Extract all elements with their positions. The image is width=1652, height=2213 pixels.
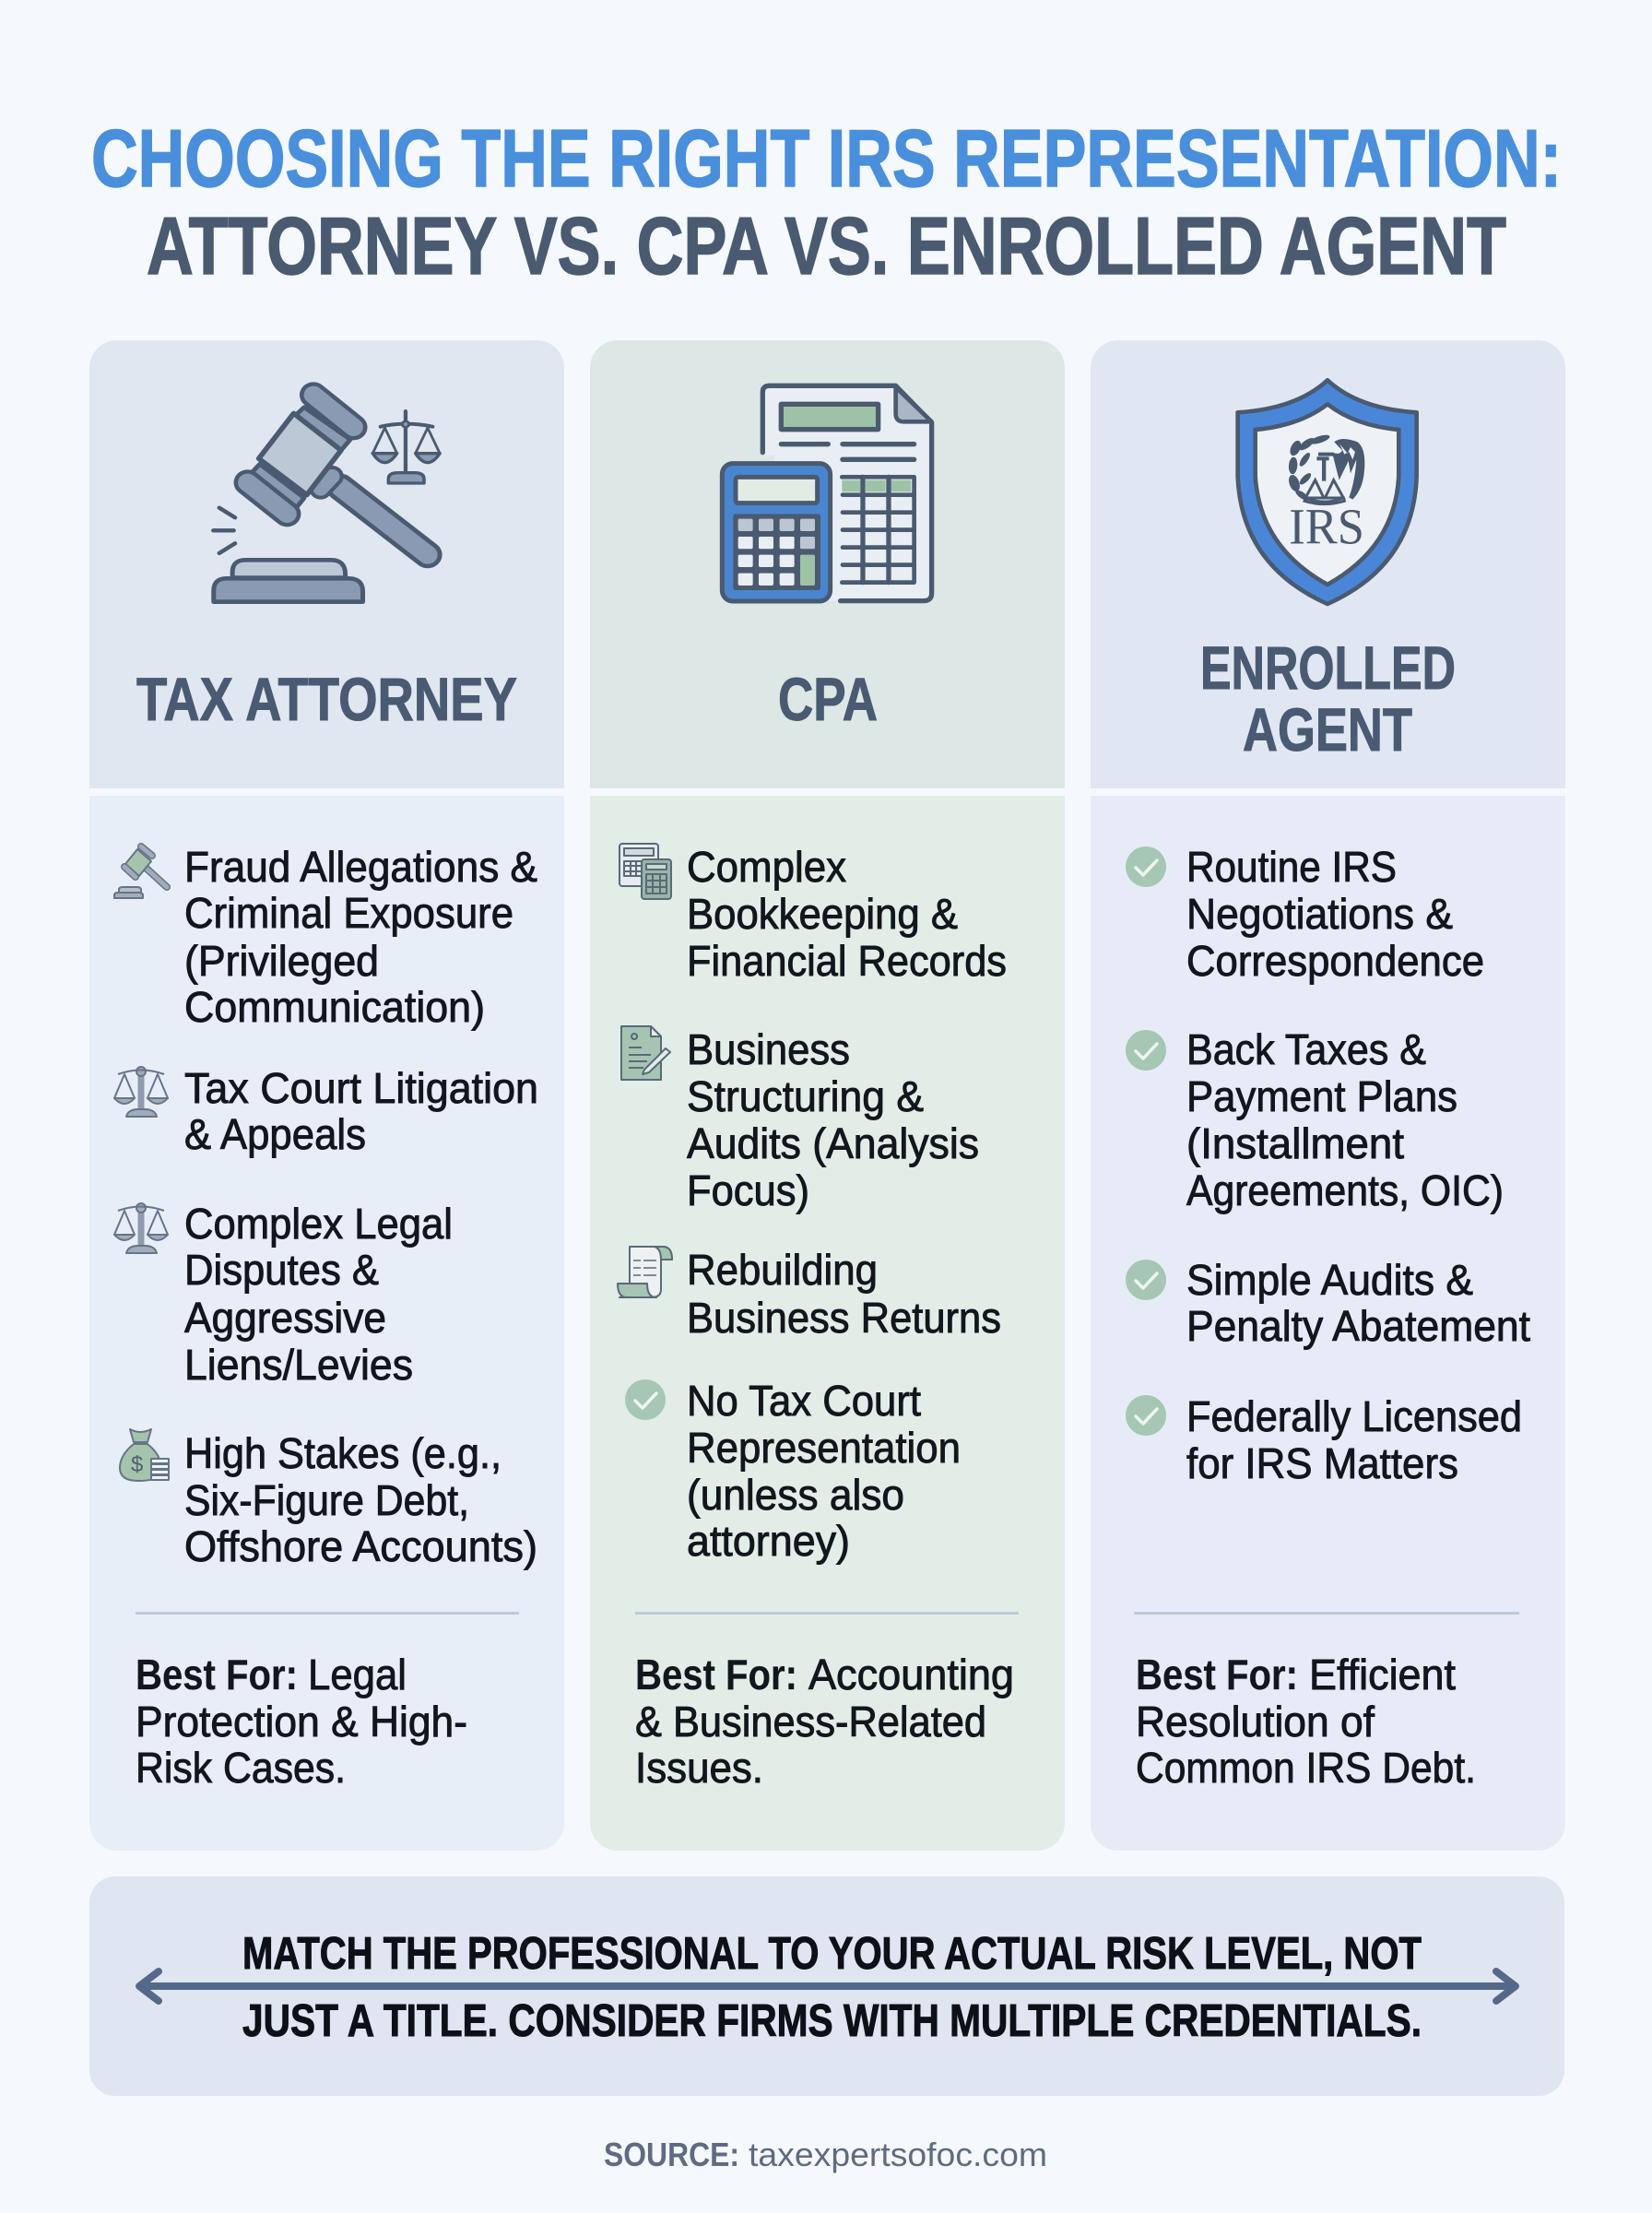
text: best for, cpa: & Business-Related [635,1698,986,1746]
heading: enrolled agent [1200,633,1456,763]
text: enrolled agent qualifications: Penalty Abatement [1186,1302,1530,1350]
text: enrolled agent qualifications: Simple Audits & [1186,1256,1473,1304]
text: cpa qualifications [687,843,1007,1565]
text: tax attorney qualifications: & Appeals [184,1110,366,1158]
text: tax attorney qualifications: Tax Court Litigation [184,1064,538,1112]
source line: SOURCE: [604,2136,739,2173]
panel: cpa [590,340,1065,1851]
icon: small scroll [618,1247,672,1297]
arrow: double-headed [139,1971,1516,2001]
text: best for, enrolled agent: Common IRS Debt. [1136,1744,1476,1792]
text: cpa qualifications: Bookkeeping & [687,890,958,938]
text: best for, tax attorney: Best For: [136,1651,298,1698]
callout: bottom banner [89,1876,1564,2096]
icon: IRS shield [1238,380,1417,604]
text: enrolled agent qualifications: Federally Licensed [1186,1392,1522,1440]
text: tax attorney qualifications: Six-Figure Debt, [184,1476,469,1524]
text: cpa qualifications: (unless also [687,1471,904,1519]
text: best for, enrolled agent: Resolution of [1136,1698,1375,1746]
icon: gavel and scales [213,395,440,602]
text: cpa qualifications: Focus) [687,1166,809,1214]
text: enrolled agent qualifications: Correspondence [1186,937,1484,985]
text: cpa qualifications: Rebuilding [687,1246,878,1294]
heading: tax attorney: TAX ATTORNEY [136,665,517,733]
text: best for, enrolled agent [1136,1651,1476,1792]
text: best for, cpa: Best For: [635,1651,797,1698]
text: enrolled agent qualifications: Negotiations & [1186,890,1453,938]
text: best for, enrolled agent: Efficient [1309,1651,1456,1698]
icon: small scales [114,1067,168,1117]
icon: check [625,1379,666,1420]
source line [604,2136,1047,2173]
body background: tax attorney [89,796,564,1851]
text: cpa qualifications: Complex [687,843,846,891]
heading: enrolled agent: AGENT [1243,695,1412,763]
text: enrolled agent qualifications: (Installment [1186,1119,1404,1167]
icon: IRS emblem [1287,433,1364,504]
header background: cpa [590,340,1065,788]
icon: small gavel [114,846,167,898]
text: tax attorney qualifications: Complex Legal [184,1200,453,1248]
text: cpa qualifications: Business [687,1025,850,1073]
panel: enrolled agent [1091,340,1565,1851]
text: tax attorney qualifications: (Privileged [184,937,379,985]
icon: check [1126,846,1166,887]
text: enrolled agent qualifications: Back Taxes & [1186,1025,1426,1073]
icon: IRS shield: IRS [1289,498,1364,554]
text: cpa qualifications: Audits (Analysis [687,1119,979,1167]
panel: tax attorney [89,340,564,1851]
header background: enrolled agent [1091,340,1565,788]
text: tax attorney qualifications: Fraud Allegations & [184,843,537,891]
text: tax attorney qualifications: Offshore Accounts) [184,1522,537,1570]
text: best for, cpa [635,1651,1014,1792]
icon: check [1126,1260,1166,1300]
body background: cpa [590,796,1065,1851]
text: enrolled agent qualifications: Payment Plans [1186,1072,1457,1120]
text: best for, tax attorney [136,1651,467,1792]
text: cpa qualifications: No Tax Court [687,1377,921,1425]
text: tax attorney qualifications: Criminal Exposure [184,889,513,937]
text: cpa qualifications: Financial Records [687,937,1007,985]
text: cpa qualifications: Representation [687,1424,961,1472]
text: best for, cpa: Issues. [635,1744,763,1792]
icon: money bag [120,1429,169,1481]
icon: money bag: $ [131,1452,143,1477]
text: tax attorney qualifications: Liens/Levies [184,1341,413,1389]
text: enrolled agent qualifications: Routine IRS [1186,843,1397,891]
icon: small calculator [620,844,671,899]
banner text: JUST A TITLE. CONSIDER FIRMS WITH MULTIPLE CREDENTIALS. [242,1996,1422,2046]
text: cpa qualifications: attorney) [687,1517,850,1565]
source line: taxexpertsofoc.com [749,2136,1047,2173]
text: enrolled agent qualifications [1186,843,1530,1487]
icon: small scales [114,1203,168,1253]
text: tax attorney qualifications: Aggressive [184,1294,386,1342]
text: cpa qualifications: Business Returns [687,1294,1001,1342]
text: best for, tax attorney: Protection & High- [136,1698,467,1746]
text: tax attorney qualifications: Communication) [184,983,485,1031]
title [91,112,1562,291]
icon: check [1126,1395,1166,1436]
text: tax attorney qualifications [184,843,538,1570]
banner text [242,1929,1422,2046]
text: enrolled agent qualifications: for IRS Matters [1186,1439,1458,1487]
banner text: MATCH THE PROFESSIONAL TO YOUR ACTUAL RISK LEVEL, NOT [242,1929,1422,1979]
text: best for, tax attorney: Legal [308,1651,407,1698]
text: best for, tax attorney: Risk Cases. [136,1744,346,1792]
header background: tax attorney [89,340,564,788]
body background: enrolled agent [1091,796,1565,1851]
text: tax attorney qualifications: Disputes & [184,1246,379,1294]
heading: enrolled agent: ENROLLED [1200,633,1456,702]
banner background [89,1876,1564,2096]
heading: cpa: CPA [778,665,878,733]
icon: check [1126,1030,1166,1071]
text: best for, cpa: Accounting [808,1651,1014,1698]
text: best for, enrolled agent: Best For: [1136,1651,1298,1698]
text: tax attorney qualifications: High Stakes (e.g., [184,1429,502,1477]
icon: calculator and spreadsheet [722,385,932,601]
text: cpa qualifications: Structuring & [687,1072,924,1120]
icon: small document and pen [621,1026,670,1080]
text: enrolled agent qualifications: Agreements, OIC) [1186,1166,1504,1214]
